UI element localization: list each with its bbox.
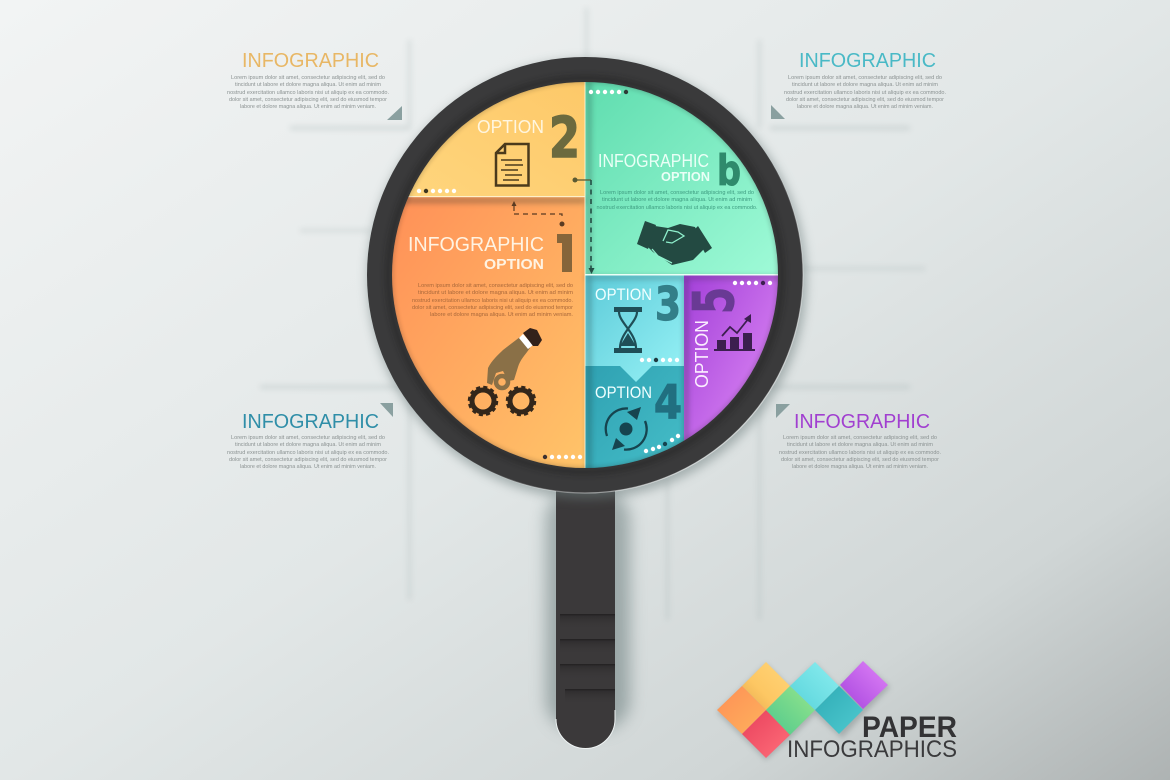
body: bottom left: Lorem ipsum dolor sit amet, consectetur adipiscing elit, sed do bbox=[231, 435, 385, 441]
body: bottom right: Lorem ipsum dolor sit amet, consectetur adipiscing elit, sed do bbox=[783, 435, 937, 441]
heading: bottom right: INFOGRAPHIC bbox=[794, 411, 930, 433]
connector: orange to yellow bbox=[512, 201, 564, 226]
panel: option 5 purple bbox=[684, 276, 778, 441]
number 1 bbox=[557, 234, 572, 272]
gears bbox=[470, 388, 534, 414]
body: top left: labore et dolore magna aliqua. Ut enim ad minim veniam. bbox=[240, 104, 376, 110]
subheading: option 1: OPTION bbox=[484, 256, 544, 273]
heading: option 3: OPTION bbox=[595, 285, 652, 304]
option 2 content bbox=[417, 106, 580, 193]
icon: document bbox=[496, 144, 528, 186]
background paper folds bbox=[260, 8, 925, 620]
number 5 rotated: 5 bbox=[682, 287, 747, 314]
body: top left bbox=[227, 75, 389, 110]
number 3: 3 bbox=[655, 277, 681, 331]
ring bbox=[367, 57, 803, 493]
dots: option 6 bbox=[589, 90, 628, 94]
body: option 1: labore et dolore magna aliqua. Ut enim ad minim veniam. bbox=[430, 312, 573, 318]
lens panels bbox=[385, 75, 785, 480]
lens inner shadow bbox=[386, 76, 784, 474]
body: option 1: Lorem ipsum dolor sit amet, consectetur adipiscing elit, sed do bbox=[418, 283, 573, 289]
handle body bbox=[556, 490, 615, 748]
heading: top right: INFOGRAPHIC bbox=[799, 50, 936, 72]
body: top left: dolor sit amet, consectetur adipiscing elit, sed do eiusmod tempor bbox=[229, 97, 387, 103]
cuff bbox=[523, 328, 542, 346]
icon: cycle arrows bbox=[606, 407, 647, 450]
option 6 content bbox=[589, 90, 758, 265]
option 5 content bbox=[682, 281, 772, 388]
heading: option 2: OPTION bbox=[477, 117, 544, 137]
logo: paper infographics bbox=[717, 661, 957, 763]
panel edge highlights bbox=[408, 82, 586, 468]
heading: option 6: INFOGRAPHIC bbox=[598, 151, 709, 171]
handle shadow bbox=[546, 490, 630, 730]
body: option 1: nostrud exercitation ullamco laboris nisi ut aliquip ex ea commodo. bbox=[412, 298, 573, 304]
body: bottom right: labore et dolore magna aliqua. Ut enim ad minim veniam. bbox=[792, 464, 928, 470]
green bottom highlight bbox=[585, 274, 785, 276]
body: option 1 bbox=[412, 283, 574, 318]
panel: option 6 green bbox=[585, 75, 785, 275]
number 6 rotated: b bbox=[717, 146, 741, 195]
panel: option 2 yellow bbox=[408, 82, 585, 197]
body: top right: dolor sit amet, consectetur adipiscing elit, sed do eiusmod tempor bbox=[786, 97, 944, 103]
text block: top left bbox=[227, 50, 389, 110]
logo diamonds bbox=[717, 661, 888, 758]
separator shadows bbox=[405, 82, 778, 468]
subheading: option 6: OPTION bbox=[661, 169, 710, 184]
option 3 content bbox=[595, 277, 681, 362]
body: bottom right: tincidunt ut labore et dolore magna aliqua. Ut enim ad minim bbox=[787, 442, 934, 448]
dots: option 5 bbox=[733, 281, 772, 285]
icon: hourglass bbox=[614, 307, 642, 353]
panel: option 1 orange bbox=[385, 197, 585, 477]
dots: option 3 bbox=[640, 358, 679, 362]
panel: option 4 teal bbox=[585, 366, 684, 476]
body: bottom left: dolor sit amet, consectetur adipiscing elit, sed do eiusmod tempor bbox=[229, 457, 387, 463]
body: option 6: tincidunt ut labore et dolore magna aliqua. Ut enim ad minim bbox=[602, 197, 753, 203]
magnifier handle bbox=[546, 490, 630, 748]
heading: top left: INFOGRAPHIC bbox=[242, 50, 379, 72]
option 4 content bbox=[595, 375, 682, 453]
handle edge highlight bbox=[556, 710, 615, 748]
body: option 1: tincidunt ut labore et dolore magna aliqua. Ut enim ad minim bbox=[418, 290, 574, 296]
heading: option 1: INFOGRAPHIC bbox=[408, 234, 544, 256]
text block: bottom right bbox=[779, 411, 941, 470]
hand bbox=[487, 337, 530, 385]
heading: bottom left: INFOGRAPHIC bbox=[242, 411, 379, 433]
body: bottom right: dolor sit amet, consectetur adipiscing elit, sed do eiusmod tempor bbox=[781, 457, 939, 463]
dots: option 4 bbox=[644, 434, 680, 453]
number 2: 2 bbox=[549, 106, 580, 171]
option 1 content bbox=[408, 234, 582, 459]
body: top right bbox=[784, 75, 946, 110]
body: top left: Lorem ipsum dolor sit amet, consectetur adipiscing elit, sed do bbox=[231, 75, 385, 81]
panel: option 3 cyan bbox=[585, 275, 684, 382]
connector: yellow to cyan bbox=[572, 178, 594, 274]
body: option 6: nostrud exercitation ullamco laboris nisi ut aliquip ex ea commodo. bbox=[596, 205, 758, 211]
magnifier ring bbox=[367, 57, 807, 499]
logo word: infographics: INFOGRAPHICS bbox=[787, 736, 957, 763]
small gear bbox=[496, 376, 508, 388]
logo shadow bbox=[717, 663, 890, 760]
cuff band bbox=[519, 334, 533, 349]
body: option 6: Lorem ipsum dolor sit amet, consectetur adipiscing elit, sed do bbox=[600, 190, 754, 196]
heading: option 4: OPTION bbox=[595, 383, 652, 402]
text block: top right bbox=[784, 50, 946, 110]
number 4: 4 bbox=[654, 375, 682, 429]
body: top right: Lorem ipsum dolor sit amet, consectetur adipiscing elit, sed do bbox=[788, 75, 942, 81]
icon: bar chart bbox=[714, 314, 755, 351]
icon: handshake bbox=[637, 221, 712, 265]
dots: option 2 bbox=[417, 189, 456, 193]
logo word: paper: PAPER bbox=[862, 711, 957, 744]
handle grip bands bbox=[560, 614, 615, 705]
text block: bottom left bbox=[227, 411, 389, 470]
ring drop shadow bbox=[367, 59, 807, 499]
icon: hand with gears bbox=[470, 328, 542, 414]
body: bottom left: labore et dolore magna aliqua. Ut enim ad minim veniam. bbox=[240, 464, 376, 470]
corner fold triangles bbox=[380, 105, 790, 418]
ring edge highlight bbox=[367, 57, 803, 493]
body: bottom right: nostrud exercitation ullamco laboris nisi ut aliquip ex ea commodo. bbox=[779, 450, 941, 456]
body: top right: nostrud exercitation ullamco laboris nisi ut aliquip ex ea commodo. bbox=[784, 90, 946, 96]
body: top left: nostrud exercitation ullamco laboris nisi ut aliquip ex ea commodo. bbox=[227, 90, 389, 96]
body: top right: labore et dolore magna aliqua. Ut enim ad minim veniam. bbox=[797, 104, 933, 110]
heading: option 5 rotated: OPTION bbox=[692, 320, 712, 388]
body: bottom left bbox=[227, 435, 389, 470]
body: bottom left: nostrud exercitation ullamco laboris nisi ut aliquip ex ea commodo. bbox=[227, 450, 389, 456]
dots: option 1 bbox=[543, 455, 582, 459]
body: option 1: dolor sit amet, consectetur adipiscing elit, sed do eiusmod tempor bbox=[412, 305, 573, 311]
body: top right: tincidunt ut labore et dolore magna aliqua. Ut enim ad minim bbox=[792, 82, 939, 88]
body: option 6 bbox=[596, 190, 758, 211]
body: bottom right bbox=[779, 435, 941, 470]
body: top left: tincidunt ut labore et dolore magna aliqua. Ut enim ad minim bbox=[235, 82, 382, 88]
body: bottom left: tincidunt ut labore et dolore magna aliqua. Ut enim ad minim bbox=[235, 442, 382, 448]
ring inner shade bbox=[388, 78, 782, 472]
